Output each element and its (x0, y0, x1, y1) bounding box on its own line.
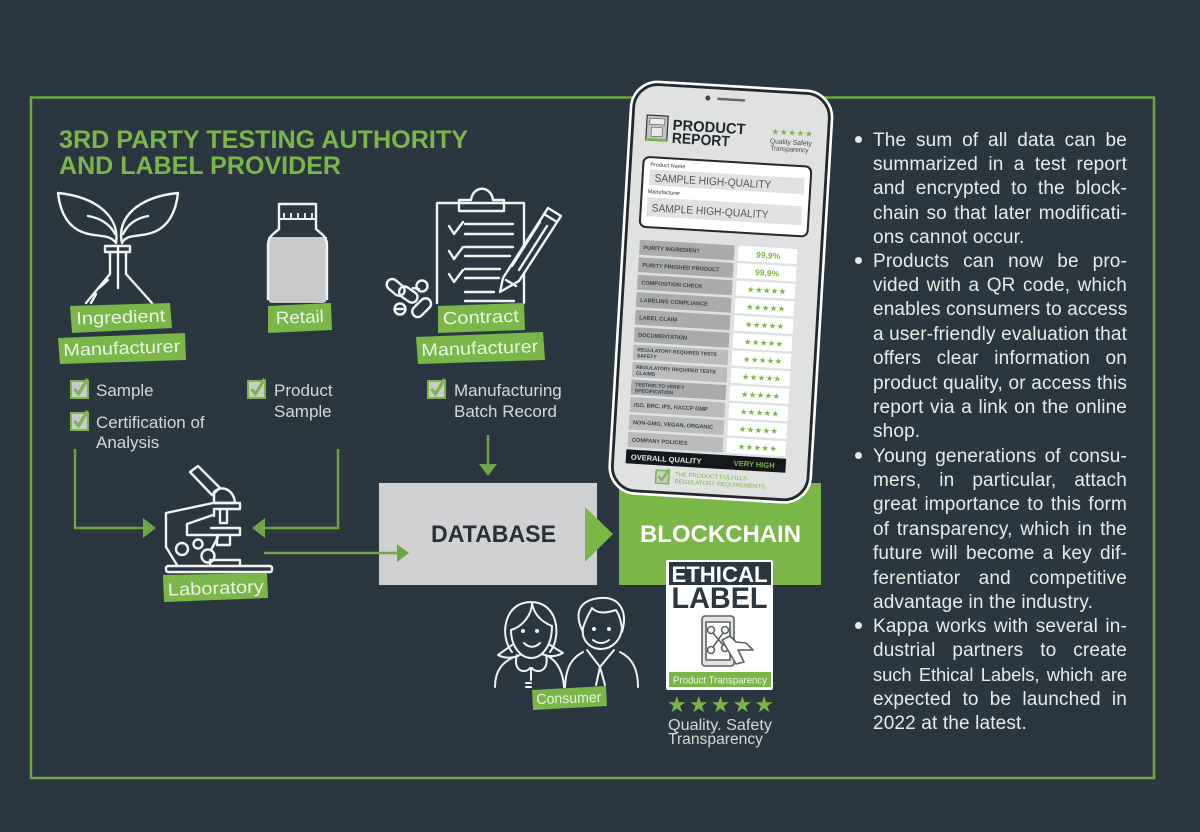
bullet text: Kappa: such Ethical Labels, which are (873, 664, 1127, 685)
bullet text: Kappa: expected to be launched in (873, 689, 1127, 710)
icon: hand on tablet (702, 616, 753, 666)
bullet text: test report: summarized in a test report (873, 154, 1127, 175)
label: consumer: Consumer (536, 690, 602, 708)
arrow: ingredient manufacturer to laboratory (75, 449, 156, 538)
checklist: contract manufacturer: Manufacturing (454, 381, 562, 400)
report rows: NON-GMO, VEGAN, ORGANIC (633, 420, 713, 431)
report rows: LABELING COMPLIANCE (640, 298, 708, 308)
icon: retail bottle (268, 204, 327, 303)
bullet text: QR code: shop. (873, 421, 920, 442)
report rows: DOCUMENTATION (638, 333, 687, 342)
bullet text: test report: ons cannot occur. (873, 227, 1024, 248)
phone: product report (607, 79, 835, 505)
report rows: ISO, BRC, IFS, HACCP GMP (634, 403, 708, 413)
report rows: ★★★★★ (737, 441, 778, 454)
product name card: SAMPLE HIGH-QUALITY (654, 173, 772, 191)
label: ingredient manufacturer: Manufacturer (63, 336, 181, 360)
checklist: contract manufacturer (428, 379, 562, 421)
report rows: ★★★★★ (741, 389, 781, 401)
ethical label badge: Product Transparency (673, 674, 768, 686)
report rows: REGULATORY REQUIRED TESTS (637, 347, 718, 358)
arrow: contract manufacturer to database (479, 435, 497, 476)
report rows: CLAIMS (636, 371, 656, 378)
report rows: SAFETY (637, 353, 657, 360)
compliance note (655, 468, 766, 491)
label: consumer (532, 686, 607, 710)
report rows: ★★★★★ (747, 284, 787, 297)
consumer eyes (521, 627, 611, 633)
label: ingredient manufacturer (58, 303, 186, 364)
checklist: ingredient manufacturer: Certification of (96, 413, 205, 432)
compliance note: REGULATORY REQUIREMENTS (674, 479, 765, 491)
title (59, 126, 468, 180)
bullet text: young generations: ferentiator and competitive (873, 568, 1127, 589)
ethical label badge: LABEL (672, 582, 768, 615)
arrow: retail to laboratory (252, 449, 338, 538)
bullet text: QR code (855, 250, 1127, 442)
checklist: retail: Sample (274, 402, 332, 421)
report rows: ★★★★★ (738, 424, 779, 436)
rating stars: ★★★★★ (667, 692, 774, 717)
bullet text: young generations: mers, in particular, attach (873, 470, 1127, 491)
report header: ★★★★★ (771, 126, 814, 139)
report rows: COMPANY POLICIES (632, 438, 688, 447)
icon: consumers (495, 598, 638, 687)
report rows: COMPOSITION CHECK (641, 280, 703, 290)
checklist: retail: Product (274, 381, 333, 400)
report rows: ★★★★★ (743, 354, 783, 366)
report rows: ★★★★★ (742, 372, 782, 384)
bullet text: young generations (855, 446, 1127, 613)
label: retail: Retail (275, 306, 324, 328)
bullet text: young generations: great importance to this form (873, 494, 1127, 515)
label: retail (268, 303, 332, 333)
outer border frame (31, 98, 1154, 778)
arrow: database to blockchain (585, 507, 613, 562)
bullet text: QR code: product quality, or access this (873, 373, 1127, 394)
product name card: SAMPLE HIGH-QUALITY (651, 202, 769, 221)
icon: microscope (166, 466, 272, 572)
caption: quality, safety, transparency: Quality. Safety (668, 717, 772, 734)
report rows: REGULATORY REQUIRED TESTS (636, 365, 716, 376)
overall quality bar: VERY HIGH (733, 459, 775, 470)
bullet text: QR code: a user-friendly evaluation that (873, 324, 1127, 345)
report rows: ★★★★★ (740, 406, 780, 419)
database box (379, 483, 597, 585)
product name card (640, 157, 811, 237)
compliance note: THE PRODUCT FULFILLS (675, 472, 747, 483)
bullet text: test report: The sum of all data can be (873, 130, 1127, 150)
report rows: SPECIFICATION (635, 388, 674, 396)
bullet text: young generations: advantage in the industry. (873, 592, 1093, 613)
bullet text: QR code: offers clear information on (873, 348, 1127, 369)
title: 3RD PARTY TESTING AUTHORITY (59, 126, 468, 154)
checklist: retail (248, 379, 333, 421)
overall quality bar: OVERALL QUALITY (631, 453, 702, 466)
bullet text: test report (855, 130, 1127, 248)
bullet text: Kappa: Kappa works with several in- (873, 616, 1127, 636)
label: contract manufacturer (416, 303, 545, 364)
report rows: LABEL CLAIM (639, 315, 677, 324)
checklist: ingredient manufacturer (71, 379, 205, 452)
ethical label badge (666, 560, 773, 690)
report rows: ★★★★★ (745, 319, 785, 331)
bullet text: test report: chain so that later modificati- (873, 203, 1127, 224)
icon: clipboard with pencil and pills (384, 189, 561, 319)
report rows: 99,9% (755, 267, 780, 279)
overall quality bar (626, 449, 786, 473)
bullet text: young generations: Young generations of consu- (873, 446, 1127, 466)
report rows (628, 240, 798, 456)
bullet text: young generations: future will become a key dif- (873, 543, 1127, 564)
label: contract manufacturer: Manufacturer (421, 336, 539, 360)
report rows: ★★★★★ (744, 337, 784, 349)
label: contract manufacturer: Contract (442, 306, 519, 328)
report header (645, 115, 814, 155)
checklist: ingredient manufacturer: Analysis (96, 433, 159, 452)
product name card: Manufacturer (647, 189, 680, 197)
report header: Transparency (770, 145, 809, 155)
report rows: PURITY INGREDIENT (643, 245, 700, 255)
report header: Quality Safety (770, 138, 812, 148)
arrow: laboratory to database (264, 544, 409, 562)
report rows: 99,9% (756, 250, 781, 261)
database box: DATABASE (431, 521, 556, 548)
report rows: TESTING TO VERIFY (635, 382, 685, 391)
report header: PRODUCT (672, 117, 746, 138)
bullet text: Kappa (855, 616, 1127, 734)
label: ingredient manufacturer: Ingredient (76, 305, 166, 329)
checklist: contract manufacturer: Batch Record (454, 402, 557, 421)
title: AND LABEL PROVIDER (59, 152, 341, 180)
bullet text: Kappa: 2022 at the latest. (873, 713, 1027, 734)
report header: REPORT (671, 130, 730, 150)
bullet text: QR code: Products can now be pro- (873, 250, 1127, 272)
bullet text: QR code: report via a link on the online (873, 397, 1127, 418)
report rows: ★★★★★ (746, 302, 786, 314)
blockchain box (619, 483, 821, 585)
label: laboratory: Laboratory (167, 576, 264, 600)
caption: quality, safety, transparency (668, 717, 772, 748)
product name card: Product Name (650, 162, 686, 170)
label: laboratory (163, 573, 268, 602)
bullet text: QR code: vided with a QR code, which (873, 275, 1127, 296)
bullet text: Kappa: dustrial partners to create (873, 640, 1127, 661)
checklist: ingredient manufacturer: Sample (96, 381, 154, 400)
caption: quality, safety, transparency: Transparency (668, 731, 763, 748)
blockchain box: BLOCKCHAIN (640, 521, 801, 548)
bullet text: QR code: enables consumers to access (873, 299, 1127, 320)
icon: plant in flask (58, 193, 178, 303)
bullet text: test report: and encrypted to the block- (873, 178, 1127, 199)
ethical label badge: ETHICAL (672, 562, 768, 587)
bullet text: young generations: of transparency, which in the (873, 519, 1127, 540)
report rows: PURITY FINISHED PRODUCT (642, 263, 720, 274)
